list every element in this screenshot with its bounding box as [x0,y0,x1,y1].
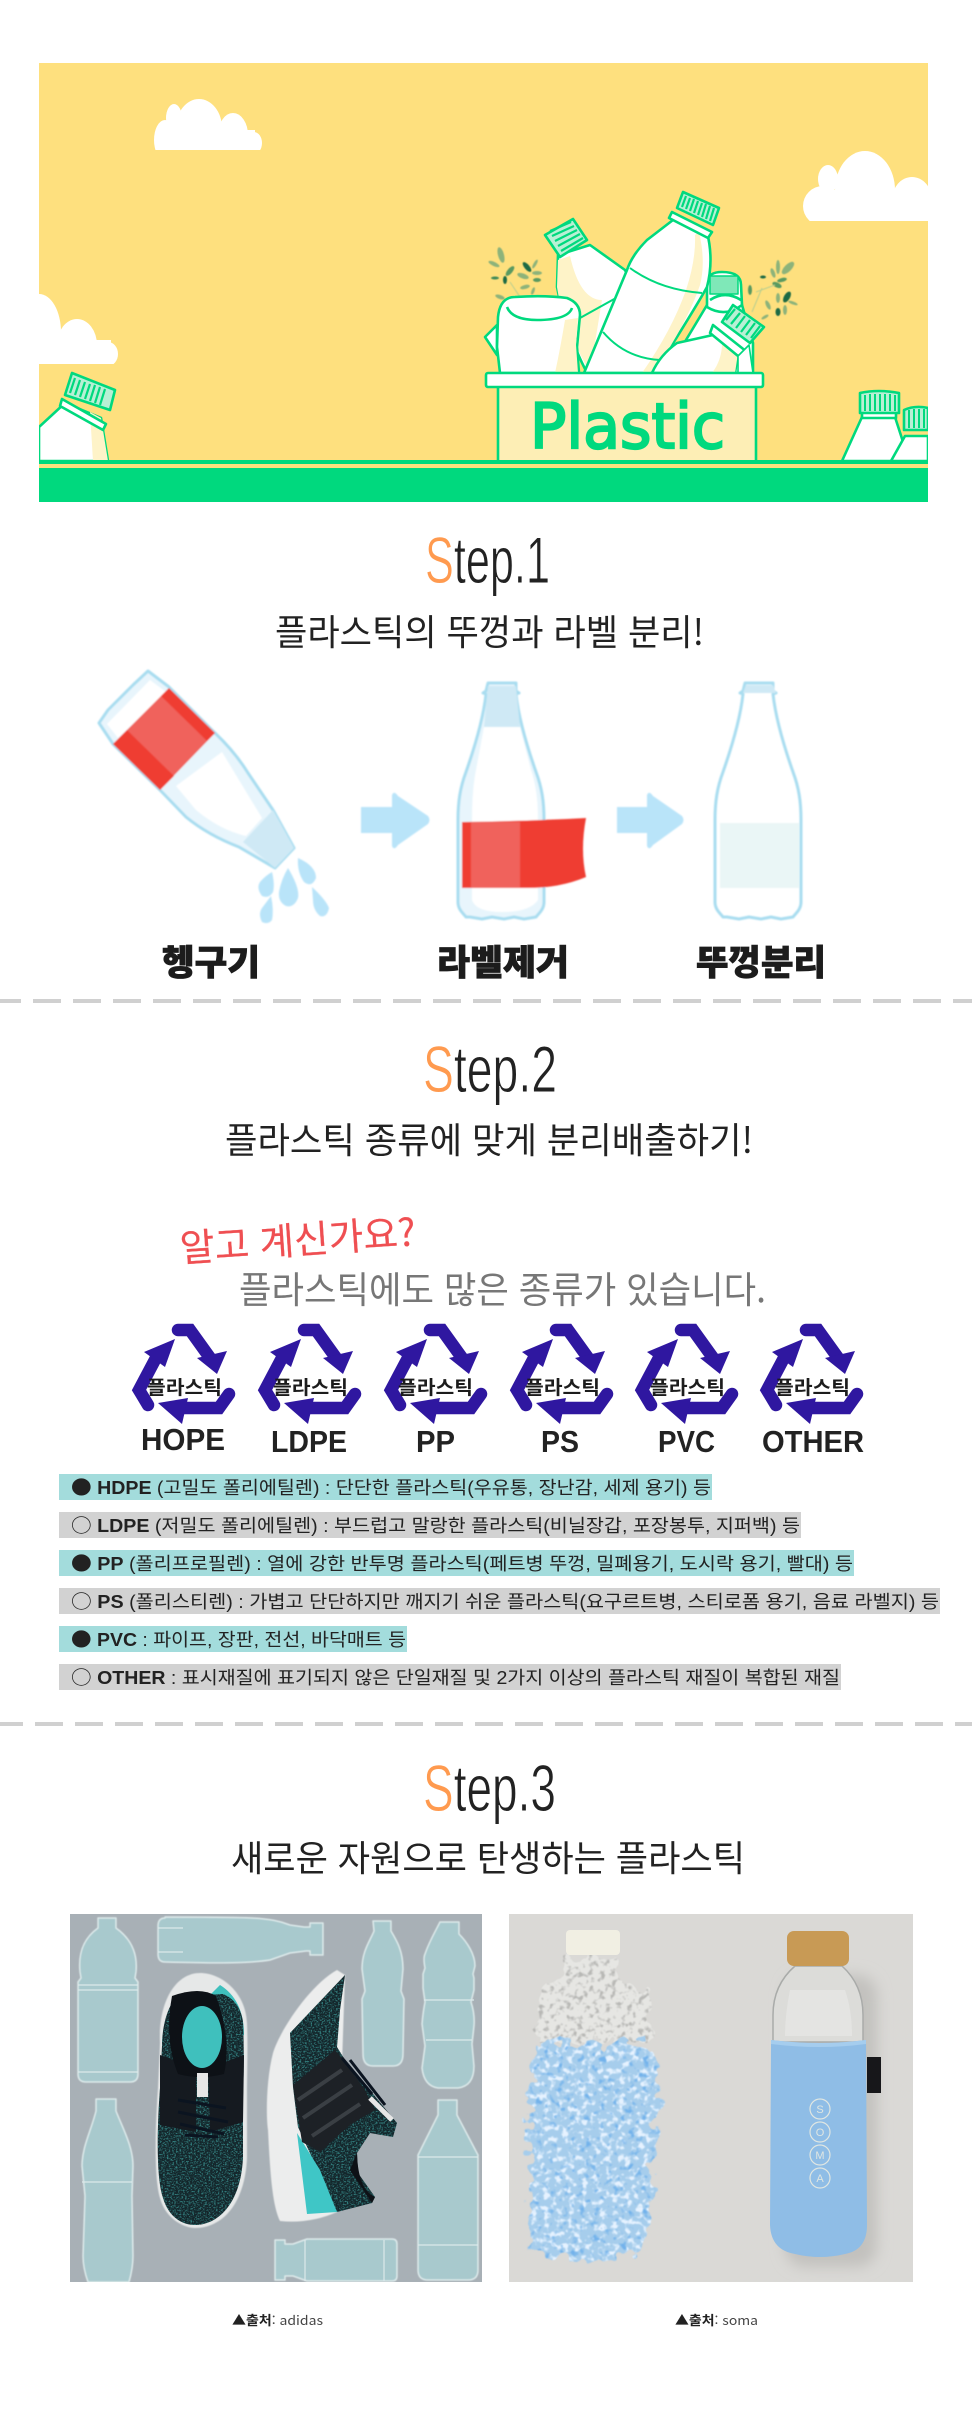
icon: cloud right [803,151,928,221]
legend row: OTHER: ○ OTHER : 표시재질에 표기되지 않은 단일재질 및 2가지 이상의 플라스틱 재질이 복합된 재질 [71,1663,840,1690]
tag [867,2057,881,2093]
icon: left bottom bottle [39,373,115,461]
photo: soma recycled bottle [509,1914,913,2282]
illustration: rinsing tilted bottle [99,671,329,923]
recycling icon: PS [517,1330,607,1459]
illustration: clean bottle without cap [715,683,801,919]
ground band [39,460,928,502]
soma logo: O [816,2127,825,2139]
banner illustration: plastic bottles in recycling box [17,63,932,502]
legend row: PS: ○ PS (폴리스티렌) : 가볍고 단단하지만 깨지기 쉬운 플라스틱(요구르트병, 스티로폼 용기, 음료 라벨지) 등 [71,1587,939,1614]
label: remove label: 라벨제거 [437,935,569,986]
recycling icon: HDPE: HOPE [141,1422,225,1457]
caption: adidas source: ▲출처: adidas [232,2310,323,2329]
legend row: LDPE: ○ LDPE (저밀도 폴리에틸렌) : 부드럽고 말랑한 플라스틱(비닐장갑, 포장봉투, 지퍼백) 등 [71,1511,800,1538]
heading: Step.3: Step.3 [423,1751,556,1825]
label: separate cap: 뚜껑분리 [696,935,826,986]
legend row: PVC: ● PVC : 파이프, 장판, 전선, 바닥매트 등 [71,1625,406,1652]
handwritten note: 알고 계신가요? [178,1202,417,1273]
recycling box [486,373,763,462]
recycling icon: PS: PS [541,1424,579,1459]
recycling icon: LDPE [265,1330,355,1459]
recycling icon: PS: 플라스틱 [525,1373,600,1400]
intro text: 플라스틱에도 많은 종류가 있습니다. [239,1260,766,1314]
icon: back small bottle [683,272,753,373]
recycling icon: PP [391,1330,481,1459]
illustration: bottle with label being removed [458,683,586,919]
label: rinse: 헹구기 [162,935,260,986]
recycling icon: OTHER: 플라스틱 [775,1373,850,1400]
recycling icon: PVC: PVC [658,1424,715,1459]
recycling icon: PP: 플라스틱 [398,1373,473,1400]
heading: Step.2: Step.2 [423,1032,557,1106]
icon: left leaves [488,246,542,301]
sleeve [770,2040,867,2257]
recycled flakes clear [535,1958,650,2043]
icon: right bottom bottles [842,391,928,461]
heading: Step.1: Step.1 [425,523,550,597]
recycling icon: PVC [642,1330,732,1459]
photo: adidas shoes with bottles [70,1914,482,2282]
wooden cap [787,1931,849,1966]
recycling icon: PP: PP [416,1424,455,1459]
soma logo: A [816,2173,824,2185]
legend row: HDPE: ● HDPE (고밀도 폴리에틸렌) : 단단한 플라스틱(우유통, 장난감, 세제 용기) 등 [71,1473,711,1500]
icon: cloud top left [154,99,262,150]
shoe side view [267,1970,397,2222]
soma logo: M [815,2150,825,2162]
recycled flakes blue [528,2043,660,2262]
recycling icon: PVC: 플라스틱 [650,1373,725,1400]
subtitle: step 2: 플라스틱 종류에 맞게 분리배출하기! [225,1112,753,1164]
recycling icon: OTHER [762,1330,864,1459]
legend row: PP: ● PP (폴리프로필렌) : 열에 강한 반투명 플라스틱(페트병 뚜껑, 밀폐용기, 도시락 용기, 빨대) 등 [71,1549,853,1576]
bottle shadow [785,1975,877,2267]
recycling icon: LDPE: LDPE [271,1424,347,1459]
subtitle: step 1: 플라스틱의 뚜껑과 라벨 분리! [275,604,704,656]
arrow: label removal to cap separation [617,793,684,848]
bottle silhouettes [78,1917,478,2282]
shoe top view [156,1973,247,2228]
icon: big bottle [584,192,719,373]
recycling icon: LDPE: 플라스틱 [273,1373,348,1400]
recycling icon: OTHER: OTHER [762,1424,864,1459]
icon: cloud left [39,294,118,364]
recycling icon: HDPE [139,1330,229,1457]
soma logo [810,2099,830,2188]
icon: water drops [258,858,329,923]
soma logo: S [816,2104,824,2116]
caption: soma source: ▲출처: soma [675,2310,758,2329]
arrow: step 1 to label removal [361,793,430,848]
icon: cup container [485,296,580,373]
subtitle: step 3: 새로운 자원으로 탄생하는 플라스틱 [231,1830,745,1882]
flake bottle cap [566,1930,620,1955]
box label: Plastic: Plastic [530,390,725,463]
icon: front right bottle [652,305,764,373]
glass bottle [773,1966,863,2042]
recycling icon: HDPE: 플라스틱 [147,1373,222,1400]
icon: leaning bottle left [544,218,626,370]
icon: right leaves [748,260,798,320]
